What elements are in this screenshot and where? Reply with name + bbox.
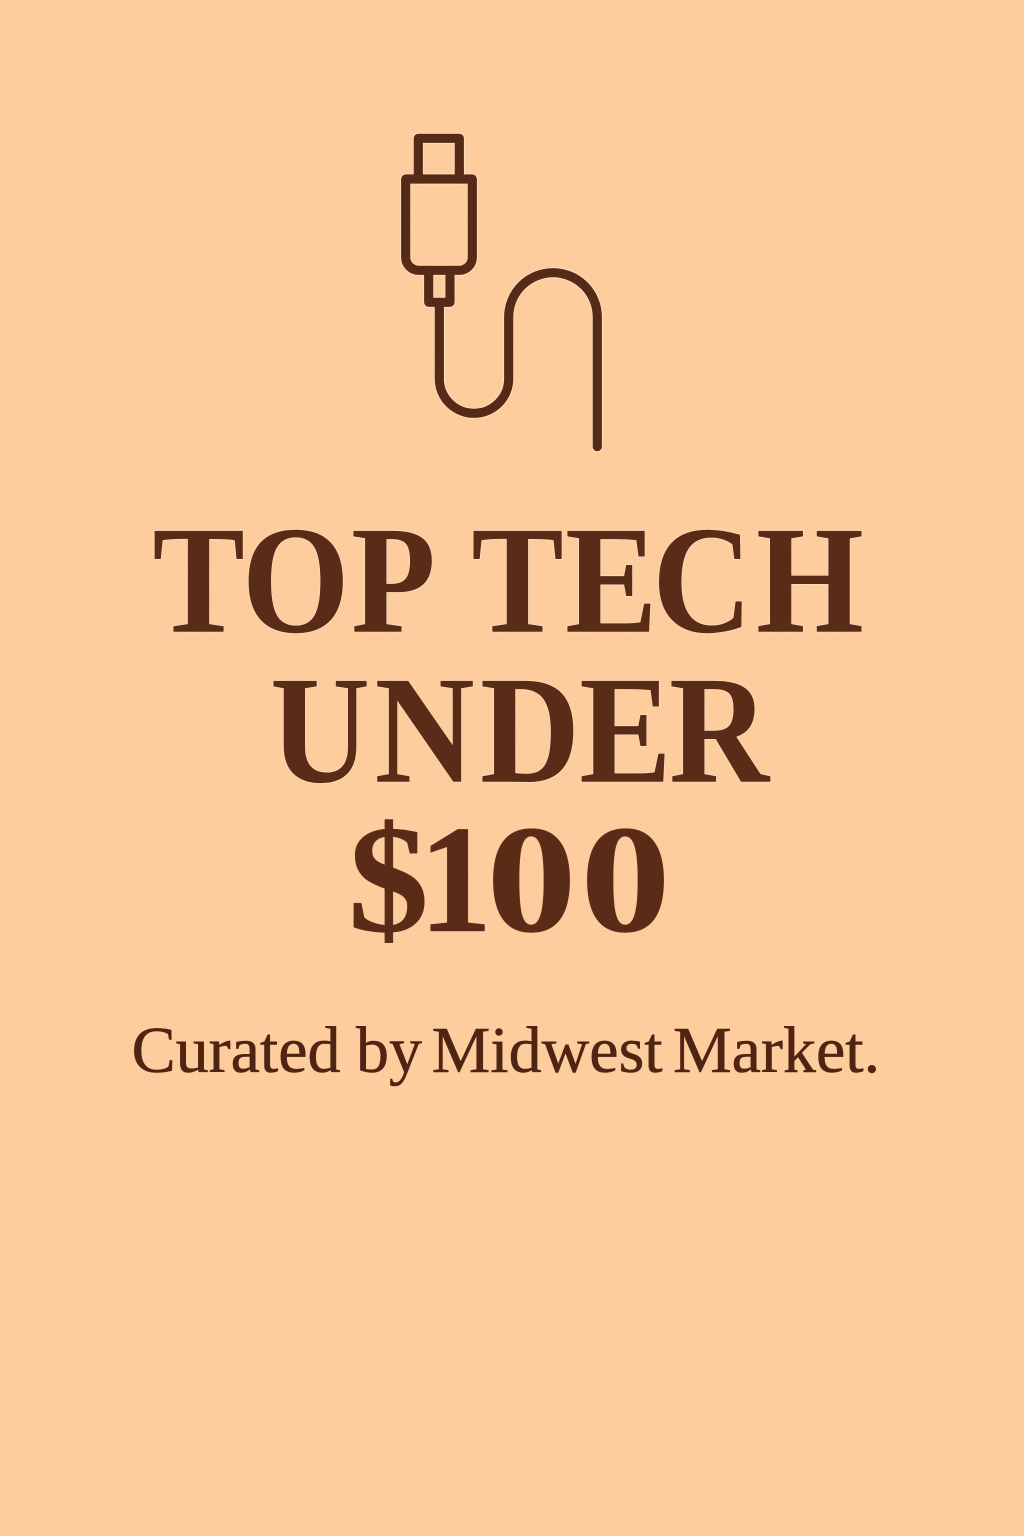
- title line 2: UNDER: [270, 644, 771, 815]
- title line 3: $: [348, 795, 428, 965]
- title line 3: [348, 795, 671, 965]
- title line 3: 1: [418, 795, 492, 965]
- title line 3: 0: [580, 795, 671, 965]
- title line 3: 0: [486, 795, 576, 965]
- subtitle: Market.: [673, 1014, 880, 1087]
- subtitle: Curated: [132, 1014, 341, 1087]
- subtitle: Midwest: [432, 1014, 663, 1087]
- icon: usb cable: [406, 138, 597, 447]
- title line 1: TOP TECH: [152, 494, 864, 665]
- subtitle: by: [356, 1014, 422, 1087]
